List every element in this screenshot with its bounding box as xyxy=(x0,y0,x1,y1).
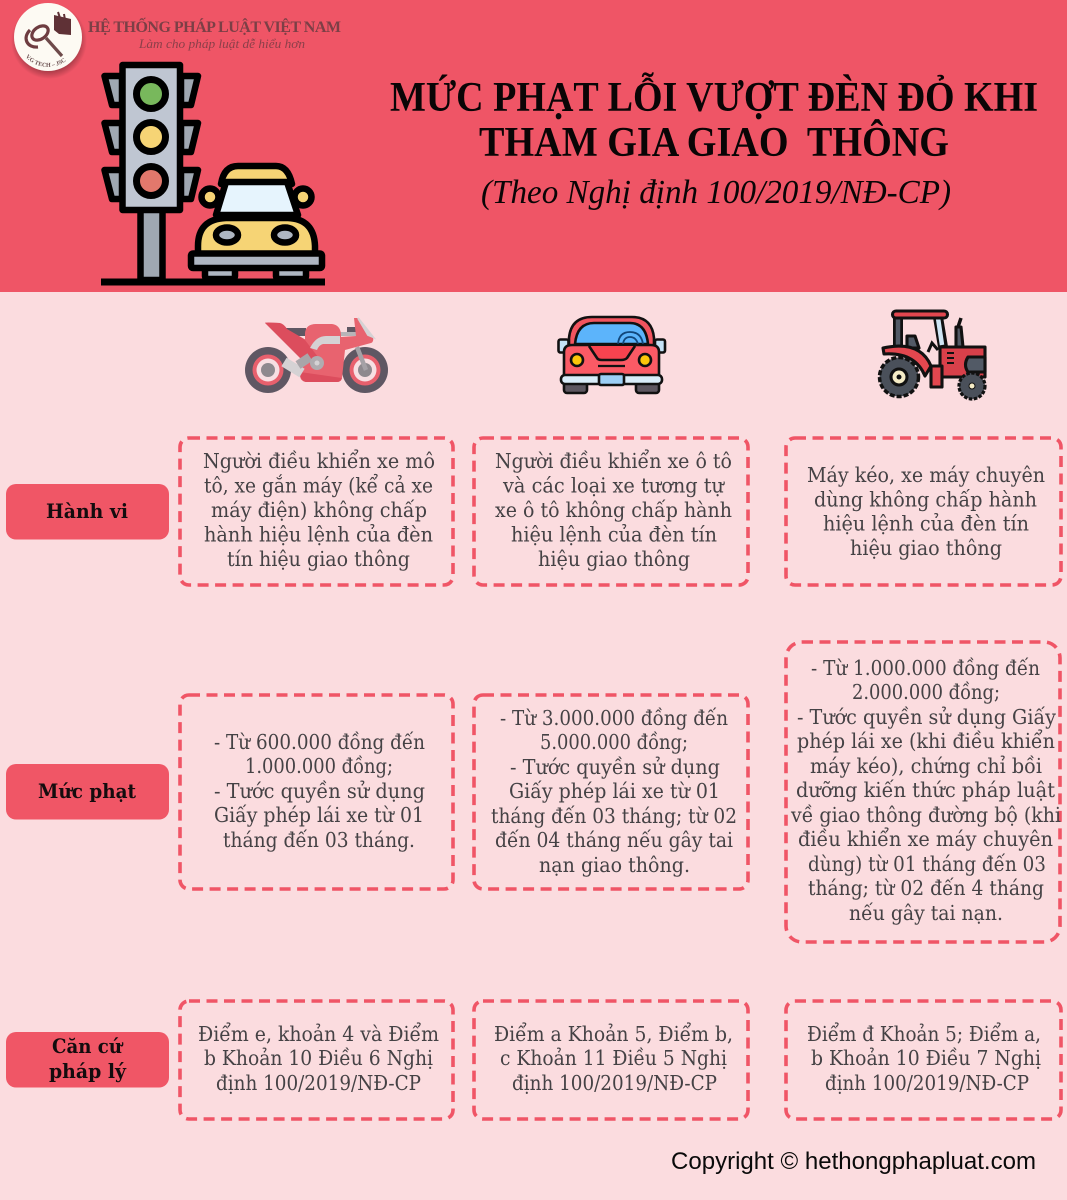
panel: car penalty: - Từ 3.000.000 đồng đến xyxy=(500,706,728,730)
panel: car penalty: đến 04 tháng nếu gây tai xyxy=(495,828,733,852)
copyright: Copyright © hethongphapluat.com xyxy=(671,1148,1036,1175)
panel: motorcycle penalty xyxy=(180,695,453,889)
title xyxy=(390,72,1038,166)
row label: Căn cứ pháp lý: Căn cứ xyxy=(52,1034,124,1058)
row label: Hành vi: Hành vi xyxy=(46,499,128,523)
panel: car legal basis xyxy=(474,1001,748,1119)
panel: car penalty: Giấy phép lái xe từ 01 xyxy=(509,779,720,803)
panel: tractor penalty: - Tước quyền sử dụng Giấy xyxy=(797,705,1056,729)
panel: tractor penalty: dùng) từ 01 tháng đến 03 xyxy=(808,852,1046,876)
panel: car legal basis: Điểm a Khoản 5, Điểm b, xyxy=(494,1022,733,1046)
cab posts xyxy=(898,317,943,347)
ground line xyxy=(101,278,325,286)
headlights xyxy=(571,354,583,366)
icon: tractor xyxy=(880,311,985,399)
panel: motorcycle behaviour xyxy=(180,438,453,585)
panel: tractor penalty: nếu gây tai nạn. xyxy=(849,901,1003,925)
row label: Hành vi xyxy=(6,484,169,540)
panel: car legal basis: c Khoản 11 Điều 5 Nghị xyxy=(500,1046,727,1070)
panel: tractor legal basis xyxy=(786,1001,1061,1119)
seat xyxy=(907,336,919,348)
panel: motorcycle penalty: 1.000.000 đồng; xyxy=(245,754,393,778)
hood xyxy=(940,347,985,377)
exhaust xyxy=(956,327,963,347)
panel: motorcycle penalty: tháng đến 03 tháng. xyxy=(223,828,415,852)
panel: motorcycle behaviour: máy điện) không chấp xyxy=(211,498,427,522)
bumper xyxy=(561,375,662,384)
panel: car penalty: - Tước quyền sử dụng xyxy=(510,755,720,779)
panel: motorcycle legal basis: định 100/2019/NĐ-CP xyxy=(216,1071,421,1095)
brand name: HỆ THỐNG PHÁP LUẬT VIỆT NAM xyxy=(88,16,341,36)
fender xyxy=(883,346,931,376)
icon: site logo xyxy=(12,3,86,78)
panel: car penalty: nạn giao thông. xyxy=(539,853,690,877)
body xyxy=(564,345,659,377)
panel: car behaviour: Người điều khiển xe ô tô xyxy=(495,449,732,473)
rear wheel xyxy=(880,358,918,396)
steering xyxy=(928,343,938,352)
icon: site logo: V.G TECH – JSC xyxy=(26,54,66,67)
panel: tractor penalty: dưỡng kiến thức pháp luật xyxy=(796,778,1056,802)
panel: tractor penalty: điều khiển xe máy chuyên xyxy=(798,827,1053,851)
cabin xyxy=(569,317,654,346)
subtitle: (Theo Nghị định 100/2019/NĐ-CP) xyxy=(481,174,951,211)
car mirrors xyxy=(202,188,218,206)
row label: Mức phạt xyxy=(6,764,169,820)
car windshield xyxy=(216,182,298,215)
panel: motorcycle penalty: - Tước quyền sử dụng xyxy=(214,779,425,803)
panel: car legal basis: định 100/2019/NĐ-CP xyxy=(512,1071,717,1095)
panel: tractor behaviour xyxy=(786,438,1061,585)
panel: car behaviour: và các loại xe tương tự xyxy=(502,474,726,498)
windshield xyxy=(575,323,648,344)
tyres xyxy=(564,380,587,393)
mirrors xyxy=(558,340,568,352)
panel: motorcycle behaviour: Người điều khiển xe mô xyxy=(203,449,435,473)
signal lamps xyxy=(136,80,166,108)
panel: tractor penalty xyxy=(786,642,1061,942)
panel: tractor penalty: tháng; từ 02 đến 4 tháng xyxy=(808,876,1044,900)
brand tagline: Làm cho pháp luật dễ hiểu hơn xyxy=(138,36,305,51)
panel: motorcycle behaviour: tô, xe gắn máy (kể cả xe xyxy=(204,474,433,498)
panel: tractor penalty: 2.000.000 đồng; xyxy=(852,680,1000,704)
pole xyxy=(140,208,162,280)
panel: car behaviour xyxy=(474,438,748,585)
panel: tractor penalty: phép lái xe (khi điều khiển xyxy=(797,729,1055,753)
signal head xyxy=(122,65,180,210)
row label: Căn cứ pháp lý: pháp lý xyxy=(49,1059,127,1083)
row label: Căn cứ pháp lý xyxy=(6,1032,169,1088)
car tyres xyxy=(205,264,235,279)
icon: traffic light and car xyxy=(101,65,325,286)
panel: car behaviour: xe ô tô không chấp hành xyxy=(495,498,732,522)
panel: car penalty: 5.000.000 đồng; xyxy=(540,730,688,754)
panel: tractor legal basis: Điểm đ Khoản 5; Điểm a, xyxy=(807,1022,1041,1046)
panel: tractor legal basis: b Khoản 10 Điều 7 Nghị xyxy=(811,1046,1041,1070)
car headlights xyxy=(216,228,238,242)
panel: car behaviour: hiệu lệnh của đèn tín xyxy=(511,522,717,546)
panel: motorcycle legal basis: Điểm e, khoản 4 và Điểm xyxy=(198,1022,439,1046)
panel: motorcycle legal basis: b Khoản 10 Điều 6 Nghị xyxy=(204,1046,433,1070)
panel: tractor legal basis: định 100/2019/NĐ-CP xyxy=(825,1071,1029,1095)
panel: tractor behaviour: dùng không chấp hành xyxy=(814,488,1037,512)
panel: motorcycle penalty: - Từ 600.000 đồng đến xyxy=(214,730,425,754)
row label: Mức phạt: Mức phạt xyxy=(38,779,137,803)
panel: tractor behaviour: Máy kéo, xe máy chuyên xyxy=(807,463,1045,487)
panel: car penalty xyxy=(474,695,748,889)
visors xyxy=(104,76,198,199)
front wheel xyxy=(959,373,985,399)
panel: motorcycle legal basis xyxy=(180,1001,453,1119)
header banner xyxy=(0,0,1067,292)
icon: car front xyxy=(558,317,665,393)
car roof xyxy=(221,166,292,184)
panel: motorcycle behaviour: hành hiệu lệnh của đèn xyxy=(204,522,433,546)
panel: tractor behaviour: hiệu giao thông xyxy=(850,536,1002,560)
title: THAM GIA GIAO THÔNG xyxy=(479,118,949,166)
panel: motorcycle behaviour: tín hiệu giao thông xyxy=(227,547,410,571)
panel: car behaviour: hiệu giao thông xyxy=(538,547,690,571)
icon: motorcycle xyxy=(245,318,388,393)
panel: tractor behaviour: hiệu lệnh của đèn tín xyxy=(823,512,1029,536)
panel: car penalty: tháng đến 03 tháng; từ 02 xyxy=(491,804,737,828)
hood xyxy=(589,346,635,360)
panel: motorcycle penalty: Giấy phép lái xe từ 01 xyxy=(214,803,424,827)
car body xyxy=(198,218,315,254)
car bumper xyxy=(191,254,322,268)
panel: tractor penalty: máy kéo), chứng chỉ bồi xyxy=(810,754,1042,778)
step xyxy=(931,366,942,387)
roof xyxy=(892,311,948,318)
panel: tractor penalty: - Từ 1.000.000 đồng đến xyxy=(811,656,1040,680)
